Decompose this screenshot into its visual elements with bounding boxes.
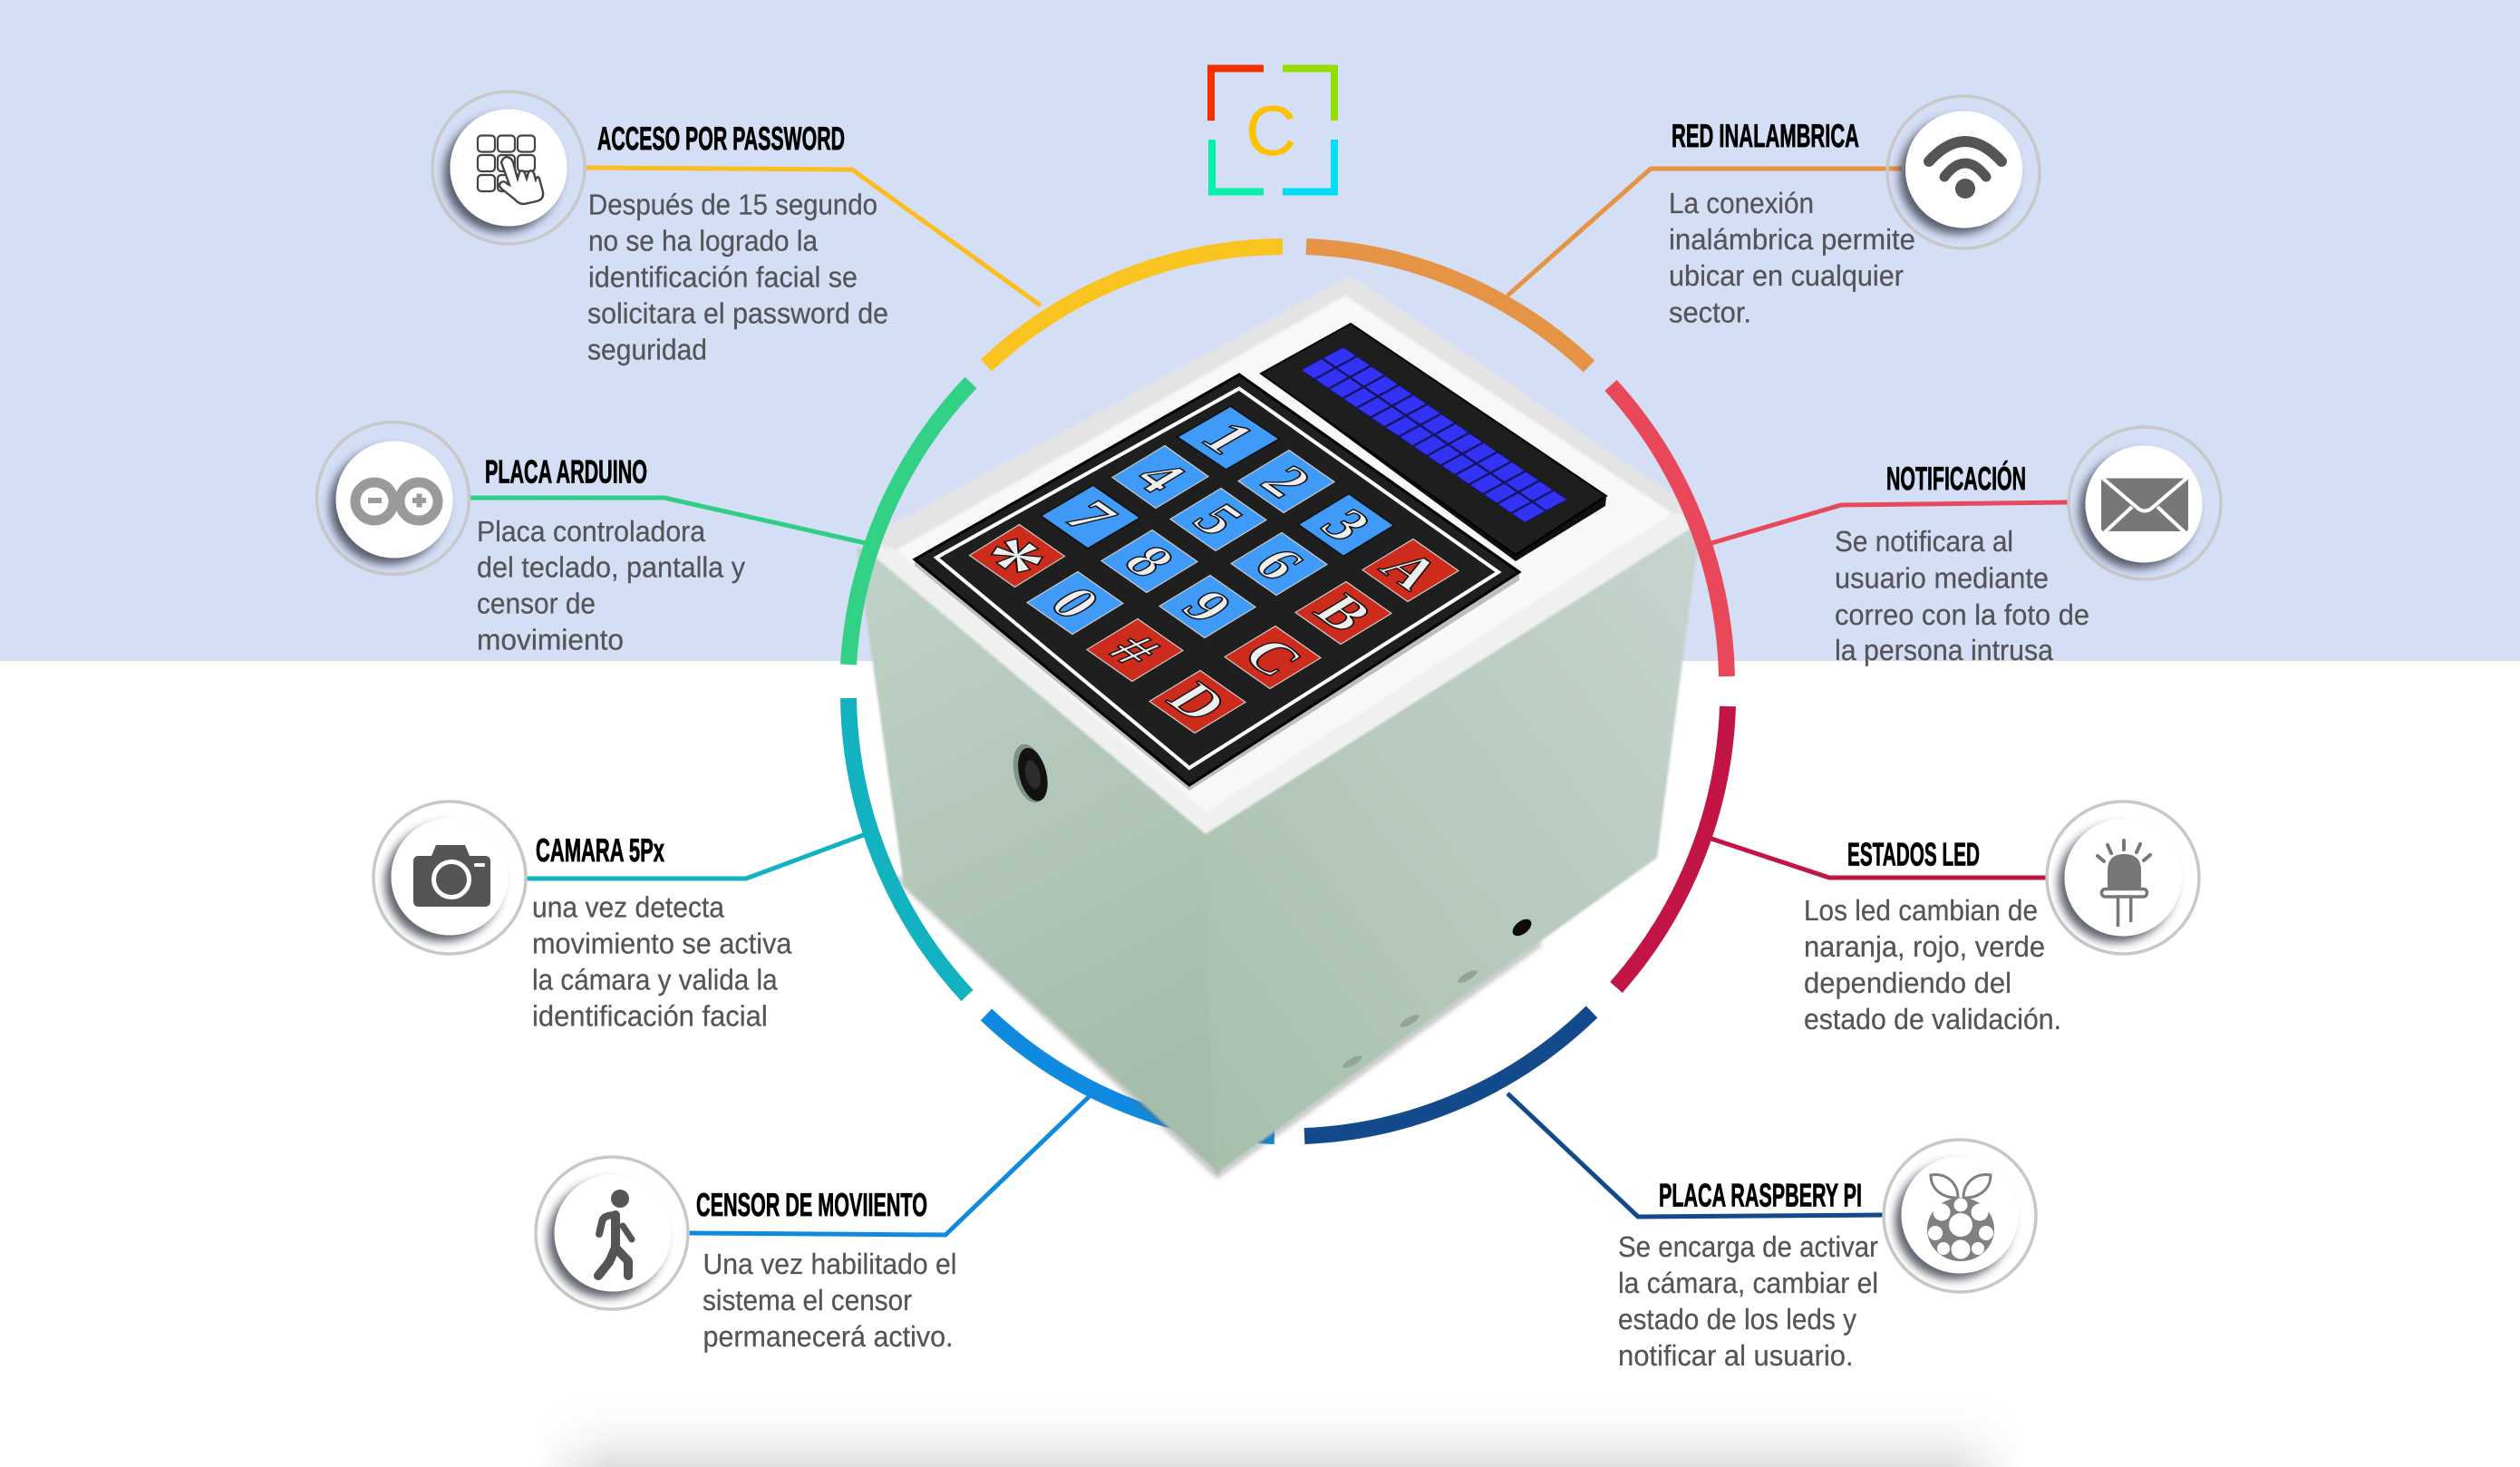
vent slot (1399, 1013, 1420, 1029)
text block (587, 189, 888, 366)
ring segment: notificacion (1611, 385, 1727, 676)
logo (1211, 69, 1334, 192)
key D: D (1153, 673, 1242, 730)
heading: CAMARA 5Px (536, 831, 664, 869)
ring segment: red inalambrica (1306, 247, 1589, 366)
heading: RED INALAMBRICA (1672, 117, 1859, 154)
text block: del teclado, pantalla y (477, 550, 745, 583)
text block: usuario mediante (1835, 562, 2049, 595)
background band (0, 0, 2520, 661)
side port (1509, 916, 1535, 939)
icon: raspberry (1884, 1140, 2036, 1292)
key 3 (1295, 491, 1397, 558)
text block: estado de validación. (1804, 1003, 2061, 1035)
panel: placa arduino (317, 423, 866, 656)
display cells (1300, 346, 1568, 523)
text block: movimiento se activa (532, 927, 792, 959)
text block: inalámbrica permite (1669, 223, 1915, 256)
panel: camara 5px (373, 802, 866, 1032)
key 7 (1038, 483, 1143, 550)
connector (470, 498, 866, 543)
text block: sector. (1669, 296, 1751, 328)
key 2: 2 (1247, 456, 1326, 506)
heading: PLACA RASPBERY PI (1659, 1177, 1862, 1213)
text block (477, 515, 745, 656)
key 5: 5 (1179, 494, 1258, 544)
ring segment: estados led (1616, 706, 1728, 987)
heading: ESTADOS LED (1847, 836, 1980, 872)
heading: PLACA ARDUINO (485, 453, 647, 490)
key 8: 8 (1110, 536, 1189, 586)
text block: identificación facial se (588, 261, 858, 294)
text block: permanecerá activo. (703, 1320, 954, 1353)
ring segment: placa arduino (848, 383, 971, 665)
icon: wifi (1887, 96, 2040, 248)
text block: dependiendo del (1804, 967, 2011, 999)
ring segment: censor de movimiento (986, 1015, 1275, 1136)
key 1 (1175, 404, 1283, 471)
connector (1711, 839, 2046, 878)
heading: NOTIFICACIÓN (1886, 460, 2026, 497)
key hash (1084, 617, 1186, 683)
box right face (1202, 524, 1698, 1174)
text block: La conexión (1669, 187, 1814, 219)
heading: ACCESO POR PASSWORD (597, 120, 845, 157)
text block: sistema el censor (703, 1284, 912, 1316)
panel: red inalambrica (1507, 96, 2040, 328)
vent slot (1457, 968, 1478, 985)
text block: la persona intrusa (1835, 634, 2053, 666)
ring segment: acceso por password (986, 247, 1283, 365)
key 4: 4 (1120, 452, 1200, 502)
key 6: 6 (1240, 539, 1319, 588)
key 8 (1099, 528, 1200, 594)
text block (703, 1248, 957, 1353)
box backing (1206, 816, 1217, 1174)
box device (857, 276, 1700, 1175)
camera lens (1008, 741, 1052, 806)
text block (1835, 525, 2089, 666)
key 1: 1 (1187, 413, 1271, 463)
key 9: 9 (1168, 581, 1247, 631)
logo: C (1245, 91, 1296, 170)
display (1261, 324, 1606, 561)
key 9 (1157, 573, 1258, 639)
connector (1711, 502, 2069, 543)
text block: movimiento (477, 623, 624, 656)
text block: solicitara el password de (587, 297, 888, 330)
text block: Una vez habilitado el (703, 1248, 957, 1280)
icon: arduino logo (317, 423, 470, 575)
text block: censor de (477, 587, 596, 619)
text block: la cámara y valida la (532, 963, 778, 996)
connector (586, 168, 1041, 306)
text block: Los led cambian de (1804, 894, 2038, 927)
icon: walking person (536, 1157, 688, 1309)
box left face (857, 548, 1219, 1174)
icon: led (2047, 802, 2199, 954)
panel: notificacion (1711, 427, 2221, 666)
keypad (915, 374, 1519, 791)
key B: B (1301, 585, 1387, 640)
text block: Se encarga de activar (1618, 1230, 1878, 1263)
text block: identificación facial (532, 999, 768, 1032)
icon: camera (373, 802, 526, 954)
text block: la cámara, cambiar el (1618, 1267, 1878, 1299)
vent slot (1342, 1054, 1363, 1070)
box shadow (897, 878, 1541, 1175)
key 7: 7 (1050, 491, 1131, 542)
text block: Placa controladora (477, 515, 705, 548)
icon: keypad with hand (432, 92, 585, 244)
text block: estado de los leds y (1618, 1303, 1856, 1336)
text block: naranja, rojo, verde (1804, 930, 2045, 963)
text block: notificar al usuario. (1618, 1339, 1854, 1372)
bottom shadow (555, 1430, 2001, 1467)
key 4 (1110, 443, 1211, 510)
ring segment: camara (848, 698, 967, 996)
panel: acceso por password (432, 92, 1041, 366)
key asterisk: * (937, 520, 1074, 607)
text block (1669, 187, 1915, 328)
text block: Se notificara al (1835, 525, 2013, 558)
text block (1618, 1230, 1878, 1372)
key C: C (1228, 628, 1317, 685)
icon: envelope (2069, 427, 2221, 579)
connector (689, 1095, 1090, 1235)
text block: una vez detecta (532, 890, 724, 923)
key 0 (1024, 569, 1126, 636)
key 6 (1228, 530, 1330, 597)
key hash: # (1096, 625, 1175, 675)
text block (532, 890, 792, 1032)
connector (1507, 1093, 1884, 1217)
text block: no se ha logrado la (588, 225, 818, 257)
box lid (859, 276, 1700, 834)
text block: seguridad (587, 334, 707, 366)
ring segment: placa raspberry (1304, 1012, 1592, 1136)
text block: Después de 15 segundo (588, 189, 877, 221)
key 3: 3 (1307, 500, 1386, 549)
connector (526, 834, 866, 879)
panel: placa raspberry pi (1507, 1093, 2036, 1372)
key 2 (1236, 448, 1337, 514)
text block: correo con la foto de (1835, 598, 2089, 631)
key A: A (1366, 541, 1455, 598)
text block (1804, 894, 2061, 1035)
key 5 (1168, 486, 1269, 552)
connector (1507, 169, 1902, 296)
panel: censor de movimiento (536, 1095, 1090, 1353)
text block: ubicar en cualquier (1669, 259, 1904, 292)
panel: estados led (1711, 802, 2199, 1035)
key 0: 0 (1036, 578, 1115, 627)
heading: CENSOR DE MOVIIENTO (696, 1186, 927, 1223)
